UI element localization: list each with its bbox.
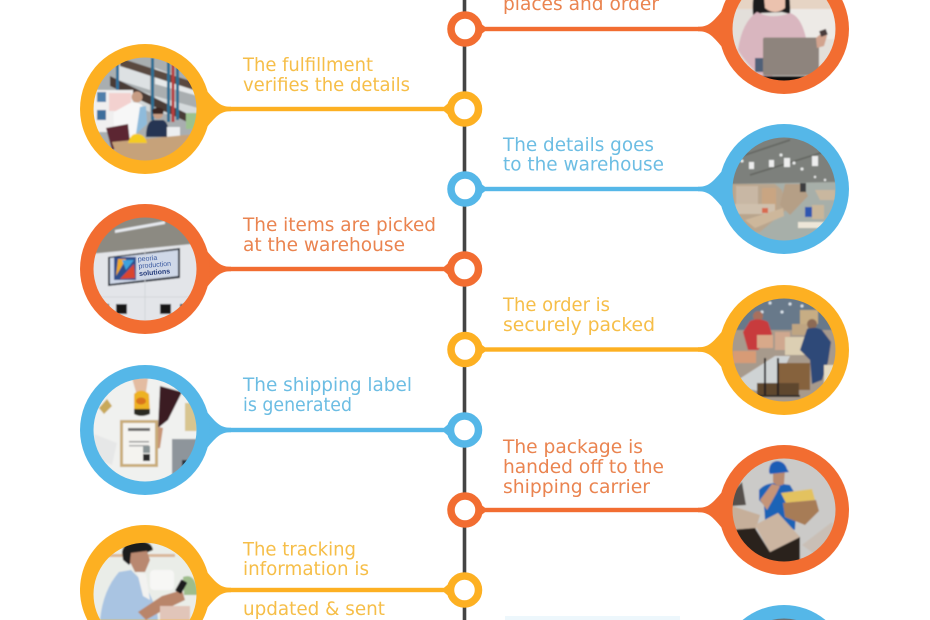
text: fulfillment step: verifies the details	[243, 75, 410, 96]
ring: delivery step, cropped by the frame	[742, 605, 826, 620]
text: packing step: The order is	[502, 295, 610, 316]
connector: tracking step	[207, 572, 456, 608]
text: picking step: The items are picked	[242, 215, 436, 236]
text: carrier step: shipping carrier	[503, 477, 650, 498]
node: tracking	[450, 576, 478, 604]
photo: customer checking a phone	[94, 542, 196, 620]
node: customer	[451, 15, 479, 43]
text: tracking step: information is	[243, 559, 369, 580]
photo: warehouse building with company sign	[94, 218, 196, 320]
text: carrier step: handed off to the	[503, 457, 664, 478]
text: tracking step: updated & sent	[243, 599, 385, 620]
ring: carrier	[719, 445, 849, 575]
text: fulfillment step: The fulfillment	[242, 55, 373, 76]
ring: fulfillment	[80, 44, 210, 174]
photo: courier holding parcels	[732, 458, 836, 562]
photo: workers packing orders	[732, 298, 836, 402]
text: tracking step: The tracking	[242, 540, 356, 560]
node: packing	[451, 336, 479, 364]
sign wordmark: peoria	[138, 255, 158, 263]
text: shipping label step: The shipping label	[242, 375, 412, 396]
text: warehouse details step: to the warehouse	[503, 154, 664, 176]
text: carrier step: The package is	[502, 437, 643, 458]
text: warehouse details step: The details goes	[502, 135, 654, 156]
photo: staff checking details in a warehouse office	[94, 58, 196, 160]
connector: packing step	[470, 332, 722, 368]
node: picking	[450, 255, 478, 283]
ring: warehouse	[719, 124, 849, 254]
photo: barcode scanner over a label	[94, 378, 196, 482]
ring: shipping label	[80, 365, 210, 495]
timeline spine	[463, 0, 466, 620]
photo: woman ordering on a laptop	[732, 0, 836, 80]
text: shipping label step: is generated	[243, 395, 352, 416]
ring: customer	[719, 0, 849, 94]
connector: fulfillment step	[207, 91, 456, 127]
ring: packing	[719, 285, 849, 415]
ring: tracking, cropped by the frame	[80, 525, 210, 620]
connector: picking step	[207, 251, 456, 287]
photo: warehouse interior	[732, 138, 836, 240]
sign wordmark: solutions	[139, 268, 170, 278]
connector: warehouse details step	[470, 171, 722, 207]
node: fulfillment	[450, 95, 478, 123]
node: warehouse details	[451, 175, 479, 203]
connector: carrier step	[470, 492, 722, 528]
photo: delivery step, cropped by the frame	[772, 619, 796, 620]
text: packing step: securely packed	[503, 315, 655, 336]
sign wordmark: production	[138, 261, 171, 270]
node: shipping label	[450, 416, 478, 444]
sign wordmark	[138, 255, 171, 276]
text: picking step: at the warehouse	[243, 235, 405, 256]
ring: picking	[80, 204, 210, 334]
node: carrier	[451, 496, 479, 524]
connector: customer step	[470, 11, 722, 47]
connector: shipping label step	[207, 412, 456, 448]
